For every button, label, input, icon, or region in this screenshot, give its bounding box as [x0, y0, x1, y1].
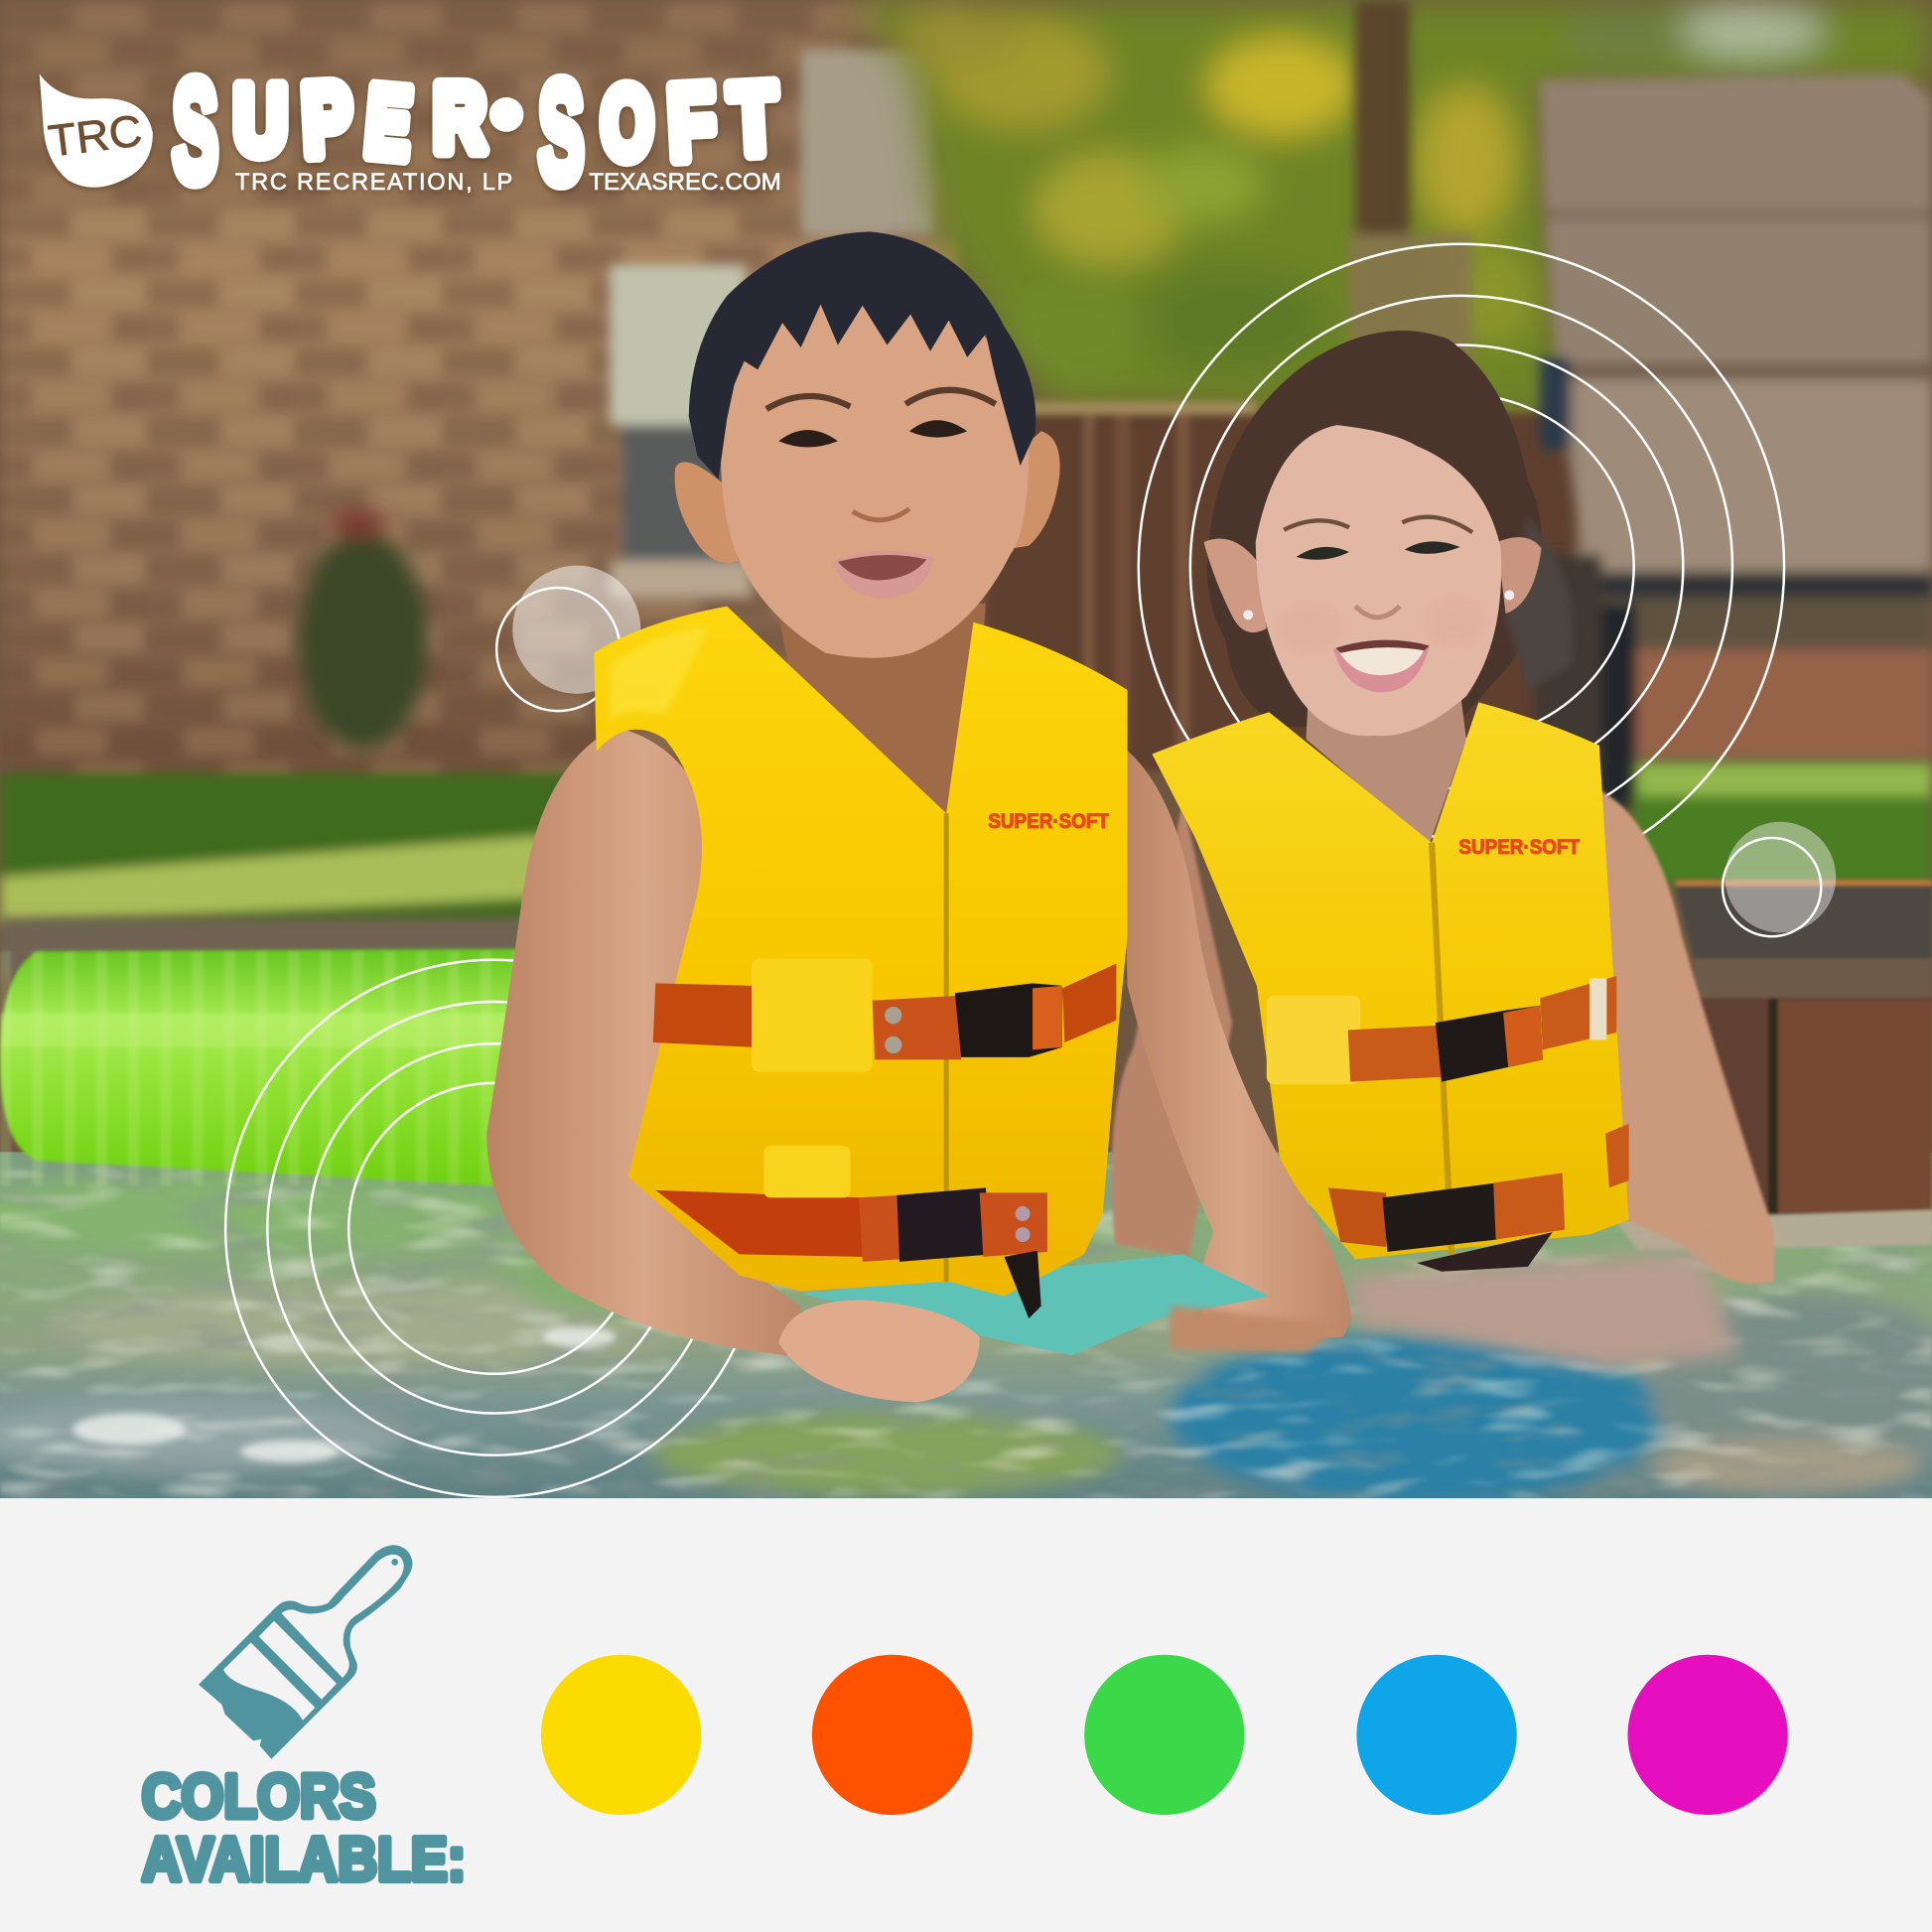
color swatch: blue [1356, 1655, 1517, 1815]
vest label: girl: SUPER·SOFT [1458, 836, 1580, 859]
boy in yellow life vest [486, 231, 1351, 1402]
logo wordmark: P [300, 62, 354, 177]
tree trunk [1349, 0, 1472, 369]
boy head [675, 231, 1060, 658]
boy vest [594, 607, 1128, 1297]
lawn [0, 761, 1932, 928]
logo wordmark: S [538, 52, 584, 211]
logo drop badge: TRC [46, 106, 145, 167]
logo drop badge [40, 73, 153, 188]
girl neck [1307, 690, 1466, 844]
stone pool wall [1614, 880, 1932, 1251]
logo wordmark: S [173, 51, 218, 210]
windows [610, 50, 936, 598]
decorative rings: left group [225, 960, 762, 1497]
color swatch: magenta [1627, 1655, 1788, 1815]
logo wordmark: O [602, 67, 653, 180]
boy neck [776, 604, 986, 819]
fence [986, 402, 1601, 771]
bush [300, 509, 428, 750]
logo subtitle: company: TRC RECREATION, LP [235, 169, 512, 195]
girl vest details [1267, 843, 1629, 1272]
boy left arm [486, 727, 801, 1355]
boy lower body in water [1171, 1307, 1343, 1353]
icon: paint brush [199, 1545, 412, 1759]
boy vest details [610, 625, 1116, 1318]
logo wordmark: U [234, 66, 287, 174]
girl face [1204, 425, 1542, 736]
brick wall [0, 0, 961, 782]
logo subtitle: website: TEXASREC.COM [589, 169, 781, 195]
trees [850, 0, 1932, 419]
panel: colors available [0, 1498, 1932, 1932]
logo wordmark [173, 51, 779, 211]
decorative bubble: right [1723, 822, 1836, 936]
logo wordmark: T [728, 64, 779, 176]
girl arms [1112, 788, 1774, 1284]
boy right arm [1121, 746, 1351, 1343]
logo wordmark: E [361, 66, 415, 180]
heading: colors available: AVAILABLE: [142, 1826, 466, 1894]
color swatch: orange [812, 1655, 972, 1815]
color swatch: yellow [541, 1655, 701, 1815]
stone ledge [0, 918, 530, 980]
decorative rings: right group [1139, 244, 1784, 890]
boy shorts [801, 1254, 1269, 1355]
logo dot [489, 97, 523, 132]
photo background: yard, wall, trees [0, 0, 1932, 1503]
heading: colors available [142, 1763, 466, 1894]
patio chair [1534, 73, 1932, 807]
girl in yellow life vest [1112, 331, 1774, 1368]
girl hair [1207, 331, 1574, 727]
vest label: boy: SUPER·SOFT [988, 810, 1109, 833]
heading: colors available: COLORS [142, 1763, 376, 1832]
decorative bubble: left [496, 566, 640, 711]
girl legs under water [1349, 1251, 1737, 1368]
pool water [0, 1152, 1932, 1503]
boy hand [778, 1300, 980, 1402]
logo: TRC Super-Soft [40, 51, 781, 211]
color swatch: green [1084, 1655, 1244, 1815]
green pool noodle float [0, 949, 530, 1187]
girl vest [1152, 702, 1629, 1259]
logo wordmark: F [665, 65, 718, 182]
logo wordmark: R [434, 66, 485, 170]
